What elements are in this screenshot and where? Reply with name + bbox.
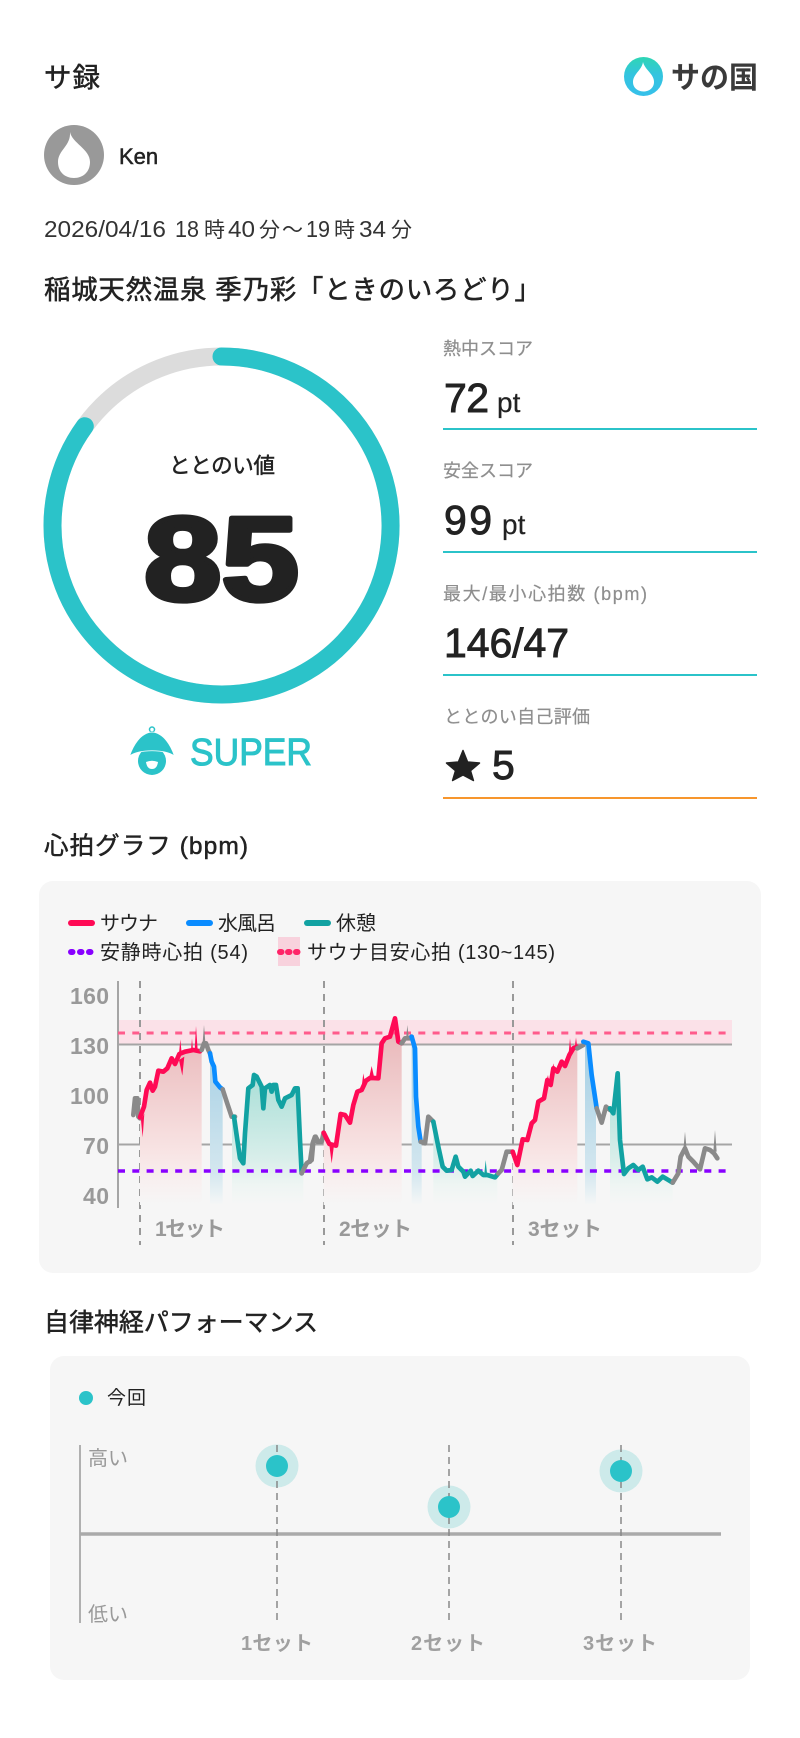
y axis labels: 40	[83, 1183, 109, 1209]
x axis labels	[241, 1633, 657, 1655]
stat: 安全スコア: 99	[444, 497, 492, 543]
set labels	[155, 1218, 602, 1241]
stat: 熱中スコア	[443, 339, 757, 430]
axes	[80, 1445, 721, 1623]
set labels: 3セット	[528, 1218, 602, 1241]
stat: 最大/最小心拍数	[443, 584, 757, 676]
y axis labels	[88, 1447, 128, 1626]
session date and time: 2026/04/16	[44, 216, 166, 242]
icon: logo water drop	[624, 57, 663, 96]
stat: 熱中スコア: 熱中スコア	[443, 339, 533, 359]
heading: 自律神経パフォーマンス: 自律神経パフォーマンス	[44, 1309, 318, 1337]
panel: heart rate chart	[39, 881, 761, 1273]
x axis labels: 1セット	[241, 1633, 313, 1655]
legend	[71, 912, 555, 966]
icon: star	[446, 750, 480, 780]
gauge label: ととのい値	[169, 454, 275, 478]
resting heart rate line	[118, 1169, 732, 1173]
heart rate line: set 2	[310, 1018, 513, 1177]
set 3 point	[600, 1445, 642, 1623]
stat: 熱中スコア: pt	[497, 387, 521, 418]
gauge: ととのい値 85	[52, 356, 391, 694]
rank badge: SUPER	[130, 727, 312, 775]
rank text: SUPER	[190, 732, 312, 774]
x axis labels: 3セット	[583, 1633, 657, 1655]
gauge value: 85	[144, 493, 299, 626]
y axis labels: 160	[70, 983, 109, 1009]
session date and time: 分	[259, 219, 280, 242]
gauge track	[52, 356, 390, 694]
session date and time: 時	[204, 219, 225, 242]
panel: autonomic performance chart	[50, 1356, 750, 1680]
facility title: 稲城天然温泉 季乃彩「ときのいろどり」	[44, 275, 541, 305]
stat: ととのい自己評価: ととのい自己評価	[444, 707, 590, 727]
session date and time: 時	[334, 219, 355, 242]
stat: 安全スコア: 安全スコア	[443, 461, 533, 481]
legend: 今回: 今回	[107, 1387, 146, 1409]
y axis labels: 高い	[88, 1447, 128, 1470]
stat: 最大/最小心拍数: 最大/最小心拍数 (bpm)	[443, 584, 647, 604]
target heart rate band	[118, 1020, 732, 1044]
set divider lines	[140, 981, 513, 1245]
axis and reference lines	[118, 981, 732, 1208]
stat: ととのい自己評価	[443, 707, 757, 799]
legend: 今回	[79, 1387, 146, 1409]
set labels: 2セット	[339, 1218, 412, 1241]
user avatar	[44, 125, 104, 185]
logo wordmark: サの国	[671, 62, 758, 95]
session date and time: 19	[306, 216, 330, 242]
heading: 心拍グラフ: 心拍グラフ (bpm)	[44, 832, 248, 860]
y axis labels: 70	[83, 1133, 109, 1159]
session date and time: 分	[391, 219, 412, 242]
area fills	[140, 1017, 673, 1205]
heart rate line: set 3	[513, 1037, 717, 1183]
sauna target line	[118, 1032, 732, 1034]
stat: 安全スコア	[443, 461, 757, 553]
heart rate line: set 1	[133, 1025, 321, 1173]
legend: 安静時心拍 (54)	[100, 941, 248, 964]
set 2 point	[428, 1445, 470, 1623]
y axis labels: 100	[70, 1083, 109, 1109]
stat: 熱中スコア: 72	[444, 375, 489, 421]
session date and time: 34	[359, 216, 386, 242]
session date and time: 〜	[282, 219, 303, 242]
stat: 安全スコア: pt	[502, 509, 526, 540]
set labels: 1セット	[155, 1218, 225, 1241]
session date and time: 18	[175, 216, 199, 242]
heading: サ録: サ録	[44, 62, 100, 93]
stat: ととのい自己評価: 5	[492, 742, 515, 788]
logo: サの国	[624, 57, 758, 96]
legend: サウナ	[100, 913, 158, 935]
gauge value arc	[53, 356, 391, 694]
legend: 休憩	[336, 912, 376, 935]
set 1 point	[256, 1444, 298, 1623]
y axis labels: 低い	[88, 1603, 128, 1626]
legend: 水風呂	[218, 912, 276, 935]
stat: 最大/最小心拍数: 146/47	[444, 620, 569, 666]
icon: hat mascot	[130, 727, 174, 775]
session date and time: 40	[228, 216, 255, 242]
y axis labels	[70, 983, 109, 1209]
legend: サウナ目安心拍 (130~145)	[307, 941, 555, 964]
user name: Ken	[119, 144, 158, 169]
x axis labels: 2セット	[411, 1633, 485, 1655]
y axis labels: 130	[70, 1033, 109, 1059]
